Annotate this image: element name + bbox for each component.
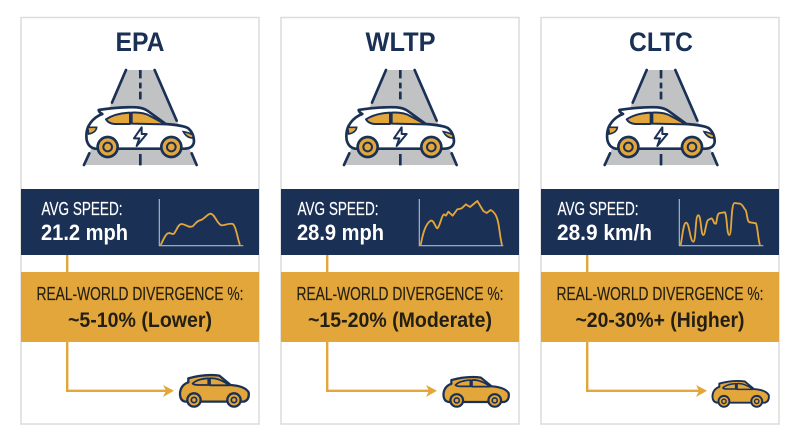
icon: road with electric car: [84, 70, 197, 165]
chart: EPA speed trace: [159, 199, 243, 246]
icon: small car: [180, 375, 249, 407]
panel: CLTC: [541, 18, 779, 424]
label: avg speed: AVG SPEED:: [558, 199, 638, 219]
panel: WLTP: [281, 18, 519, 424]
connector: speed to divergence: [326, 255, 328, 273]
value: 5-10%: ~5-10% (Lower): [68, 308, 212, 332]
label: avg speed: AVG SPEED:: [42, 199, 122, 219]
heading: WLTP: WLTP: [366, 27, 436, 57]
heading: EPA: EPA: [116, 27, 164, 57]
value: 20-30%+: ~20-30%+ (Higher): [576, 308, 744, 332]
value: 28.9 km/h: 28.9 km/h: [557, 220, 652, 245]
chart: WLTP speed trace: [419, 199, 503, 246]
icon: small car: [443, 377, 509, 407]
icon: road with electric car: [344, 70, 457, 165]
speed band: [21, 189, 259, 255]
icon: small car: [712, 381, 769, 407]
label: avg speed: AVG SPEED:: [298, 199, 378, 219]
divergence band: [541, 272, 779, 342]
connector: speed to divergence: [66, 255, 68, 273]
chart: CLTC speed trace: [679, 199, 763, 246]
arrow: divergence to car: [67, 342, 174, 397]
icon: road with electric car: [605, 70, 717, 165]
connector: speed to divergence: [586, 255, 588, 273]
arrow: divergence to car: [587, 342, 707, 397]
panel: EPA: [21, 18, 259, 424]
value: 21.2 mph: 21.2 mph: [41, 220, 128, 245]
value: 15-20%: ~15-20% (Moderate): [308, 308, 492, 332]
label: divergence: REAL-WORLD DIVERGENCE %:: [36, 284, 244, 304]
arrow: divergence to car: [327, 342, 437, 397]
value: 28.9 mph: 28.9 mph: [297, 220, 384, 245]
divergence band: [281, 272, 519, 342]
label: divergence: REAL-WORLD DIVERGENCE %:: [296, 284, 504, 304]
speed band: [281, 189, 519, 255]
speed band: [541, 189, 779, 255]
heading: CLTC: CLTC: [629, 27, 693, 57]
divergence band: [21, 272, 259, 342]
